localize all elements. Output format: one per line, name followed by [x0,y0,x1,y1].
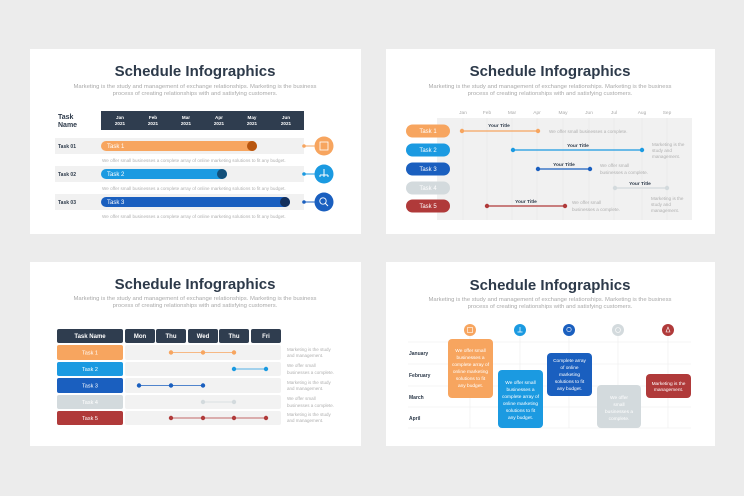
table rows: Task 5 [82,416,98,422]
header: May [248,115,257,120]
row notes: businesses a complete. [287,403,334,408]
subtitle: process of creating relationships with and satisfying customers. [468,91,633,97]
row notes: We offer small [287,396,316,401]
subtitle [429,297,672,310]
month axis: Aug [638,110,647,116]
timeline bars [460,123,669,208]
month axis: Jan [459,110,467,116]
month axis [459,110,672,116]
task pills: Task 1 [419,129,437,135]
task pills: Task 2 [419,148,437,154]
row: task 2: Task 2 [107,172,125,178]
row: task 1: Task 01 [58,144,76,150]
cards: businesses a [456,355,485,361]
task pills [406,124,450,212]
header [58,111,304,130]
month axis: Jul [611,110,617,116]
header: Feb [149,115,157,120]
table rows: Task 4 [82,400,98,406]
table rows [57,345,281,425]
header: 2021 [181,121,192,126]
descriptions: Marketing is the [651,196,684,201]
title: Schedule Infographics [470,277,630,294]
cards: management. [654,387,683,393]
cards: We offer [610,395,628,401]
cards: solutions to fit [506,408,536,414]
row notes: businesses a complete. [287,370,334,375]
row: task 3 [55,192,334,219]
row notes: Marketing is the study [287,412,332,417]
month axis: Apr [533,110,541,116]
table header: Wed [197,334,210,340]
timeline bars: Your Title [567,143,589,149]
cards [448,339,691,428]
header: 2021 [247,121,258,126]
month labels: April [409,416,421,422]
table header: Thu [166,334,177,340]
header: Name [58,122,77,129]
row: task 3: We offer small businesses a complete array of online marketing solutions to fit any budget. [102,214,286,219]
dot timelines [137,350,268,420]
table rows: Task 1 [82,350,98,356]
row: task 2: Task 02 [58,172,76,178]
month axis: Sep [663,110,672,116]
panel: bottom-left weekly table [30,262,361,446]
cards: small [613,402,625,408]
subtitle [429,84,672,97]
row: task 2 [55,164,334,191]
subtitle: process of creating relationships with and satisfying customers. [113,91,278,97]
month labels: January [409,351,428,357]
cards: businesses a [506,387,535,393]
row notes: Marketing is the study [287,347,332,352]
header: Jun [282,115,290,120]
descriptions: We offer small [572,200,601,205]
subtitle: process of creating relationships with and satisfying customers. [113,303,278,309]
table header: Fri [262,334,270,340]
table rows: Task 2 [82,367,98,373]
subtitle: Marketing is the study and management of exchange relationships. Marketing is the business [429,84,672,90]
task pills: Task 4 [419,186,437,192]
cards: complete array of [502,394,540,400]
subtitle: Marketing is the study and management of exchange relationships. Marketing is the business [74,84,317,90]
descriptions: study and [651,202,671,207]
row notes: and management. [287,386,323,391]
cards: online marketing [503,401,538,407]
cards: solutions to fit [456,376,486,382]
subtitle [74,84,317,97]
header: 2021 [148,121,159,126]
subtitle: Marketing is the study and management of exchange relationships. Marketing is the business [429,297,672,303]
header: Apr [215,115,223,120]
cards: businesses a [605,409,633,415]
icons [464,324,674,336]
month labels: February [409,373,431,379]
month axis: Jun [585,110,593,116]
month labels [409,351,431,422]
row notes [287,347,334,423]
table header [57,329,281,343]
header: Jan [116,115,124,120]
title: Schedule Infographics [115,276,275,293]
timeline bars: Your Title [515,199,537,205]
descriptions: study and [652,148,672,153]
table header: Mon [134,334,146,340]
header: 2021 [281,121,292,126]
table header: Thu [228,334,240,340]
descriptions: businesses a complete. [600,170,648,175]
cards: marketing [559,372,580,378]
row: task 1: We offer small businesses a complete array of online marketing solutions to fit any budget. [102,158,286,163]
panel: bottom-right monthly cards [386,262,715,446]
descriptions: management. [652,154,680,159]
cards: any budget. [508,415,533,421]
header: 2021 [214,121,225,126]
cards: online marketing [453,369,488,375]
descriptions [549,129,685,213]
timeline bars: Your Title [488,123,510,129]
subtitle: process of creating relationships with and satisfying customers. [468,304,633,310]
task pills: Task 3 [419,167,437,173]
descriptions: We offer small businesses a complete. [549,129,627,134]
row: task 3: Task 03 [58,200,76,206]
cards: We offer small [505,380,536,386]
cards: complete array of [452,362,490,368]
row notes: and management. [287,353,323,358]
cards: Marketing is the [652,381,686,387]
cards: Complete array [553,358,586,364]
cards: of online [560,365,579,371]
row: task 1 [55,136,334,163]
timeline bars: Your Title [629,181,651,187]
timeline bars: Your Title [553,162,575,168]
row: task 2: We offer small businesses a complete array of online marketing solutions to fit any budget. [102,186,286,191]
table rows: Task 3 [82,384,98,390]
row notes: and management. [287,418,323,423]
title: Schedule Infographics [115,63,275,80]
panel: top-left gantt [30,49,361,234]
cards: complete. [609,416,629,422]
cards: solutions to fit [555,379,585,385]
descriptions: Marketing is the [652,142,685,147]
month axis: Mar [508,110,517,116]
cards: any budget. [557,386,582,392]
row notes: Marketing is the study [287,380,332,385]
table header: Task Name [74,334,106,340]
descriptions: management. [651,208,679,213]
month labels: March [409,395,424,401]
title: Schedule Infographics [470,63,630,80]
month axis: May [558,110,568,116]
subtitle: Marketing is the study and management of exchange relationships. Marketing is the business [74,296,317,302]
panel: top-right timeline [386,49,715,234]
descriptions: businesses a complete. [572,207,620,212]
row notes: We offer small [287,363,316,368]
row: task 1: Task 1 [107,144,125,150]
task pills: Task 5 [419,204,437,210]
header: Mar [182,115,190,120]
cards: any budget. [458,383,483,389]
header: 2021 [115,121,126,126]
header: Task [58,114,74,121]
descriptions: We offer small [600,163,629,168]
cards: We offer small [455,348,486,354]
row: task 3: Task 3 [107,200,125,206]
month axis: Feb [483,110,491,116]
grid [408,336,691,428]
subtitle [74,296,317,309]
